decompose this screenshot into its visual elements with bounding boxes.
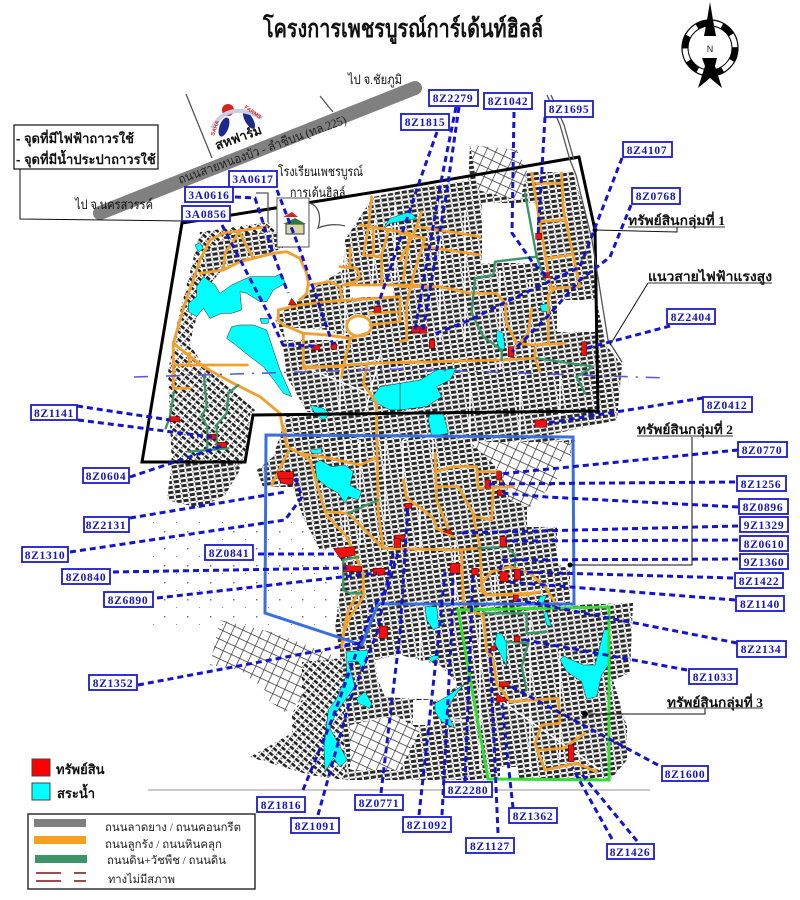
asset tag: 8Z2404 bbox=[587, 309, 715, 348]
destination label: Nakhon Sawan: ไป จ.นครสวรรค์ bbox=[74, 197, 153, 212]
boundary: asset group 2 bbox=[265, 435, 574, 645]
asset tag: 8Z1127 bbox=[466, 650, 514, 853]
callout: group 3 label bbox=[582, 693, 764, 717]
asset tag: 8Z0610 bbox=[505, 536, 788, 551]
asset tag: 8Z1815: 8Z1815 bbox=[405, 117, 445, 129]
asset tag: 8Z1310: 8Z1310 bbox=[25, 550, 65, 562]
legend: asset and water: ทรัพย์สิน bbox=[56, 762, 105, 777]
asset tag: 9Z1360: 9Z1360 bbox=[744, 557, 784, 569]
asset tag: 3A0617: 3A0617 bbox=[232, 174, 274, 186]
info box: utilities bbox=[14, 125, 185, 221]
callout: group 2 label: ทรัพย์สินกลุ่มที่ 2 bbox=[637, 420, 733, 438]
asset tag: 8Z1310 bbox=[22, 477, 302, 562]
asset tag: 8Z0841 bbox=[205, 545, 337, 560]
logo: Saha Farms: SAHA bbox=[210, 120, 221, 137]
asset tag: 8Z1426 bbox=[572, 767, 654, 859]
asset tag: 8Z0770 bbox=[500, 442, 787, 474]
asset tag: 8Z0610: 8Z0610 bbox=[744, 539, 784, 551]
asset tag: 8Z0771: 8Z0771 bbox=[359, 798, 399, 810]
info box: utilities: - จุดที่มีน้ำประปาถาวรใช้ bbox=[16, 149, 156, 168]
asset tag: 8Z1600 bbox=[510, 686, 708, 781]
asset tag: 8Z2279 bbox=[415, 90, 478, 330]
asset tag: 8Z0770: 8Z0770 bbox=[742, 445, 782, 457]
asset tag: 8Z1362 bbox=[502, 705, 557, 823]
legend: road types: ถนนดิน+วัชพืช / ถนนดิน bbox=[107, 854, 226, 867]
boundary: asset group 3 bbox=[458, 607, 609, 780]
asset tag: 3A0856: 3A0856 bbox=[185, 209, 227, 221]
asset tag: 8Z0412 bbox=[547, 397, 752, 423]
asset tag: 3A0616 bbox=[185, 187, 288, 293]
asset tag: 8Z1042: 8Z1042 bbox=[488, 96, 528, 108]
white streets bbox=[300, 200, 600, 770]
icon: north compass bbox=[682, 2, 738, 88]
logo: Saha Farms: FARMS bbox=[243, 105, 262, 121]
asset tag: 8Z0768: 8Z0768 bbox=[636, 191, 676, 203]
asset tag: 8Z1362: 8Z1362 bbox=[513, 811, 553, 823]
highway bbox=[100, 88, 415, 213]
asset tag: 8Z1091 bbox=[291, 553, 393, 833]
asset tag: 8Z1141 bbox=[31, 405, 212, 437]
asset tag: 8Z2279: 8Z2279 bbox=[433, 93, 473, 105]
asset tag: 8Z0840 bbox=[62, 568, 347, 584]
legend: road types bbox=[28, 814, 255, 889]
callout: group 2 label bbox=[568, 420, 733, 568]
asset tag: 8Z1033 bbox=[520, 639, 737, 684]
asset tag: 8Z2131: 8Z2131 bbox=[86, 520, 126, 532]
asset tag: 8Z4107: 8Z4107 bbox=[627, 145, 667, 157]
legend: road types: ถนนลูกรัง / ถนนหินคลุก bbox=[105, 838, 222, 851]
asset tag: 8Z1352 bbox=[89, 643, 360, 690]
assets (red parcels) bbox=[170, 233, 587, 762]
callout: group 3 label: ทรัพย์สินกลุ่มที่ 3 bbox=[667, 693, 764, 711]
icon: north compass: N bbox=[707, 44, 713, 54]
destination label: Chaiyaphum: ไป จ.ชัยภูมิ bbox=[347, 72, 402, 88]
callout: high-voltage line label bbox=[610, 268, 772, 345]
callout: group 1 label: ทรัพย์สินกลุ่มที่ 1 bbox=[628, 211, 725, 229]
asset tag: 8Z0896 bbox=[503, 493, 788, 514]
asset tag: 8Z1033: 8Z1033 bbox=[693, 672, 733, 684]
minor roads north bbox=[186, 94, 622, 362]
asset tag: 8Z1695 bbox=[538, 101, 593, 237]
asset tag: 8Z1816 bbox=[257, 553, 398, 812]
logo: Saha Farms bbox=[210, 104, 264, 153]
title: โครงการเพชรบูรณ์การ์เด้นท์ฮิลล์ bbox=[262, 13, 543, 45]
asset tag: 8Z2280 bbox=[444, 575, 492, 797]
asset tag: 8Z1141: 8Z1141 bbox=[34, 408, 74, 420]
asset tag: 8Z1140 bbox=[507, 582, 784, 611]
asset tag: 8Z1600: 8Z1600 bbox=[665, 769, 705, 781]
legend: asset and water bbox=[32, 759, 105, 801]
asset tag: 9Z1329 bbox=[457, 517, 788, 533]
highway label: ถนนสายหนองบัว - ลำชีบน (ทล.225) bbox=[176, 113, 348, 187]
callout: high-voltage line label: แนวสายไฟฟ้าแรงสูง bbox=[648, 268, 772, 285]
roads: laterite (orange) bbox=[173, 173, 597, 772]
legend: road types: ถนนลาดยาง / ถนนคอนกรีต bbox=[105, 821, 241, 834]
school: การเด้นฮิลล์. bbox=[290, 185, 348, 200]
asset tag: 8Z1815 bbox=[378, 114, 449, 305]
asset tag: 8Z2280: 8Z2280 bbox=[448, 785, 488, 797]
asset tag: 8Z1092: 8Z1092 bbox=[407, 820, 447, 832]
asset tag: 8Z0604: 8Z0604 bbox=[86, 471, 126, 483]
asset tag: 8Z4107 bbox=[432, 142, 672, 335]
asset tag: 8Z0896: 8Z0896 bbox=[743, 502, 783, 514]
asset tag: 8Z0840: 8Z0840 bbox=[66, 572, 106, 584]
white open areas bbox=[205, 203, 595, 778]
school: โรงเรียนเพชรบูรณ์ bbox=[278, 164, 363, 180]
asset tag: 8Z1092 bbox=[403, 572, 453, 832]
asset tag: 8Z0771 bbox=[355, 505, 408, 810]
asset tag: 8Z1256 bbox=[488, 476, 786, 491]
asset tag: 8Z1091: 8Z1091 bbox=[295, 821, 335, 833]
asset tag: 8Z1256: 8Z1256 bbox=[741, 479, 781, 491]
horizontal track bbox=[148, 789, 650, 791]
asset tag: 9Z1360 bbox=[500, 554, 788, 570]
asset tag: 8Z0604 bbox=[83, 446, 222, 483]
roads: dirt (green) bbox=[166, 193, 593, 690]
asset tag: 8Z1422: 8Z1422 bbox=[739, 576, 779, 588]
asset tag: 8Z1816: 8Z1816 bbox=[261, 800, 301, 812]
asset tag: 8Z2404: 8Z2404 bbox=[671, 312, 711, 324]
asset tag: 8Z2134: 8Z2134 bbox=[741, 644, 781, 656]
school bbox=[277, 164, 363, 247]
asset tag: 3A0617 bbox=[229, 171, 333, 345]
high-voltage line bbox=[134, 369, 667, 378]
asset tag: 8Z0412: 8Z0412 bbox=[707, 400, 747, 412]
water bodies bbox=[188, 212, 611, 772]
asset tag: 8Z2134 bbox=[517, 600, 786, 657]
info box: utilities: - จุดที่มีไฟฟ้าถาวรใช้ bbox=[16, 129, 134, 147]
legend: asset and water: สระน้ำ bbox=[57, 783, 95, 801]
asset tag: 8Z0768 bbox=[512, 188, 680, 352]
map base: parcels bbox=[167, 145, 633, 780]
asset tag: 8Z6890 bbox=[104, 573, 377, 607]
asset tag: 8Z2131 bbox=[84, 492, 285, 532]
asset tag: 8Z1426: 8Z1426 bbox=[610, 847, 650, 859]
asset tag: 8Z1127: 8Z1127 bbox=[470, 841, 510, 853]
background specks bbox=[150, 520, 340, 630]
callout: group 1 label bbox=[592, 211, 725, 232]
boundary: asset group 1 bbox=[142, 157, 598, 462]
asset tag: 8Z1422 bbox=[520, 572, 783, 588]
asset tag: 8Z1352: 8Z1352 bbox=[93, 678, 133, 690]
asset tag: 3A0856 bbox=[182, 206, 315, 346]
legend: road types: ทางไม่มีสภาพ bbox=[108, 873, 175, 886]
asset tag: 8Z6890: 8Z6890 bbox=[108, 595, 148, 607]
asset tag: 8Z1042 bbox=[484, 93, 547, 277]
asset tag: 3A0616: 3A0616 bbox=[188, 190, 230, 202]
asset tag: 8Z0841: 8Z0841 bbox=[209, 548, 249, 560]
asset tag: 8Z1140: 8Z1140 bbox=[740, 599, 780, 611]
asset tag: 9Z1329: 9Z1329 bbox=[744, 520, 784, 532]
logo: Saha Farms: สหฟาร์ม bbox=[213, 122, 264, 153]
asset tag: 8Z1695: 8Z1695 bbox=[549, 104, 589, 116]
